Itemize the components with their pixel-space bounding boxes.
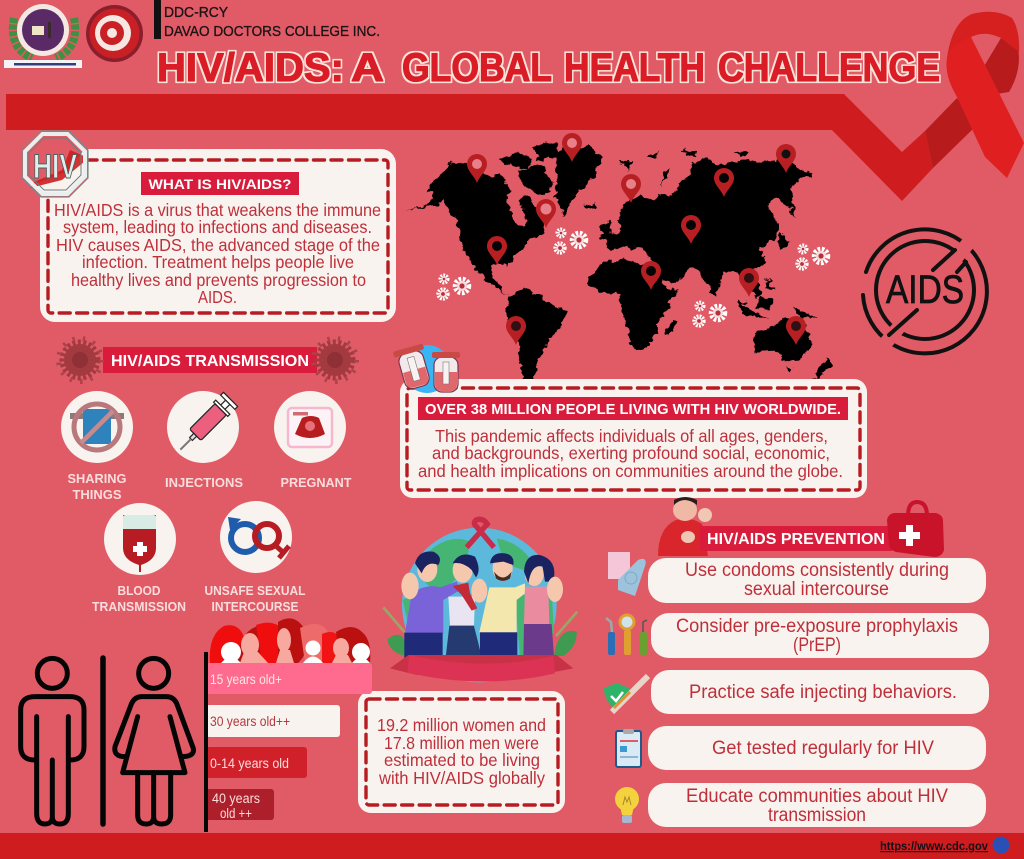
bar chart: age groups [206, 663, 372, 821]
icon: man and woman [21, 658, 193, 824]
prevention item: condoms: Use condoms consistently during [685, 560, 949, 581]
prevention item: educate: transmission [768, 805, 866, 826]
icon: no AIDS symbol [863, 229, 987, 353]
heading: HIV/AIDS transmission: HIV/AIDS TRANSMISSION [111, 353, 309, 370]
map pins [467, 133, 806, 345]
map: Eurasia [601, 158, 812, 297]
item: injections [165, 391, 243, 490]
map: UK and Iceland [585, 203, 612, 236]
panel: gender statistic: 19.2 million women and [377, 715, 546, 735]
virus particle clusters [438, 229, 828, 326]
prevention item: PrEP: (PrEP) [793, 635, 841, 656]
map: South America [506, 289, 567, 387]
icon: virus left [58, 338, 102, 382]
prevention item: condoms [608, 552, 986, 603]
item: unsafe sexual intercourse [204, 501, 306, 614]
text: definition: HIV/AIDS is a virus that weakens the immune [54, 200, 381, 220]
world map [405, 142, 831, 387]
chart axis [204, 652, 208, 832]
heading: what is HIV/AIDS [141, 172, 299, 195]
text: pandemic description: and backgrounds, exerting profound social, economic, [432, 443, 830, 463]
heading: HIV/AIDS transmission [103, 347, 317, 373]
prevention item: PrEP [606, 613, 989, 658]
divider between man and woman [100, 658, 106, 824]
map: Greenland [554, 146, 602, 215]
item: unsafe sexual intercourse: UNSAFE SEXUAL [204, 584, 306, 598]
item: blood transmission: BLOOD [118, 584, 160, 598]
item: sharing things [61, 391, 133, 502]
map: Japan and Asia-Pacific islands [738, 233, 816, 319]
icon: test tubes [393, 343, 460, 393]
prevention item: condoms: sexual intercourse [744, 579, 889, 600]
man [21, 658, 84, 824]
text: definition: HIV causes AIDS, the advanced stage of the [56, 235, 380, 255]
globe [402, 528, 557, 682]
source link: https://www.cdc.gov [880, 839, 988, 853]
prevention item: educate: Educate communities about HIV [686, 786, 948, 807]
item: unsafe sexual intercourse: INTERCOURSE [212, 600, 298, 614]
bar: 15 years old+: 15 years old+ [210, 672, 282, 687]
icon: person with raised hand [658, 497, 712, 556]
bar: 40 years old ++: old ++ [220, 806, 252, 821]
bar: 30 years old++ [206, 705, 340, 737]
panel: gender statistic: estimated to be living [384, 750, 540, 770]
map: Arctic islands [500, 142, 557, 197]
title: GLOBAL [402, 46, 552, 90]
footer band [0, 833, 1024, 859]
text: definition [54, 200, 381, 307]
bar: 0-14 years old [206, 747, 307, 778]
school name block: DDC-RCY [164, 4, 228, 21]
text: pandemic description: and health implications on communities around the globe. [418, 461, 843, 481]
bar: 15 years old+ [206, 663, 372, 694]
prevention item: safe injecting: Practice safe injecting behaviors. [689, 682, 957, 703]
text: pandemic description [418, 426, 843, 481]
map: Australia and New Zealand [753, 319, 831, 380]
school name block: DAVAO DOCTORS COLLEGE INC. [164, 23, 380, 40]
red ribbon on globe [467, 519, 494, 547]
prevention item: get tested: Get tested regularly for HIV [712, 738, 934, 759]
text: definition: infection. Treatment helps people live [82, 252, 354, 272]
person 4 [523, 555, 563, 660]
bar: 40 years old ++: 40 years [212, 791, 260, 806]
person 2 [445, 554, 487, 663]
illustration: crowd silhouettes [210, 618, 370, 663]
icon: virus right [314, 338, 356, 382]
bar: 40 years old ++ [206, 789, 274, 821]
text: definition: system, leading to infections and diseases. [63, 217, 372, 237]
item: pregnant [274, 391, 352, 490]
icon: HIV stop sign [22, 131, 88, 197]
title: CHALLENGE [718, 46, 940, 90]
logo: Davao Doctors College seal [4, 4, 82, 68]
item: blood transmission [92, 503, 186, 614]
prevention item: safe injecting [604, 670, 989, 714]
bar: 0-14 years old: 0-14 years old [210, 756, 289, 771]
school name block [154, 0, 380, 40]
prevention item: get tested [616, 726, 986, 770]
person 3 [479, 553, 525, 663]
title: A [351, 46, 384, 90]
panel: gender statistic: with HIV/AIDS globally [378, 768, 545, 788]
text: definition: healthy lives and prevents progression to [71, 270, 366, 290]
panel: gender statistic: 17.8 million men were [384, 733, 539, 753]
icon: no AIDS symbol: AIDS [886, 268, 964, 312]
heading: 38 million: OVER 38 MILLION PEOPLE LIVING WITH HIV WORLDWIDE. [425, 401, 841, 418]
text: definition: AIDS. [198, 287, 237, 307]
title [157, 46, 940, 90]
panel: what is HIV/AIDS [40, 149, 396, 322]
title: HIV/AIDS: [157, 46, 344, 90]
heading: what is HIV/AIDS: WHAT IS HIV/AIDS? [148, 176, 292, 192]
icon: HIV stop sign: HIV [33, 148, 77, 186]
item: injections: INJECTIONS [165, 476, 243, 490]
icon: first aid kit [887, 502, 944, 557]
map: Africa [589, 259, 678, 351]
header band and ribbon tail [6, 94, 977, 201]
laurel leaves [383, 607, 577, 656]
title: HEALTH [564, 46, 705, 90]
text: pandemic description: This pandemic affects individuals of all ages, genders, [435, 426, 828, 446]
banner [390, 655, 573, 681]
prevention item: PrEP: Consider pre-exposure prophylaxis [676, 616, 958, 637]
logo: college red cross youth seal [86, 5, 143, 62]
panel: global statistics [400, 379, 867, 498]
panel: gender statistic [358, 691, 565, 813]
icon: awareness ribbon [946, 12, 1024, 178]
bar: 30 years old++: 30 years old++ [210, 714, 290, 729]
map: North America [405, 163, 546, 294]
item: sharing things: THINGS [72, 488, 122, 502]
map: northern islands [620, 148, 747, 185]
item: sharing things: SHARING [68, 472, 126, 486]
heading: HIV/AIDS prevention: HIV/AIDS PREVENTION [707, 531, 885, 548]
illustration: people with globe [383, 519, 577, 682]
item: blood transmission: TRANSMISSION [92, 600, 186, 614]
prevention item: educate [615, 783, 986, 827]
heading: HIV/AIDS prevention [700, 526, 892, 551]
woman [115, 658, 193, 824]
person 1 [401, 551, 460, 661]
item: pregnant: PREGNANT [280, 476, 352, 490]
